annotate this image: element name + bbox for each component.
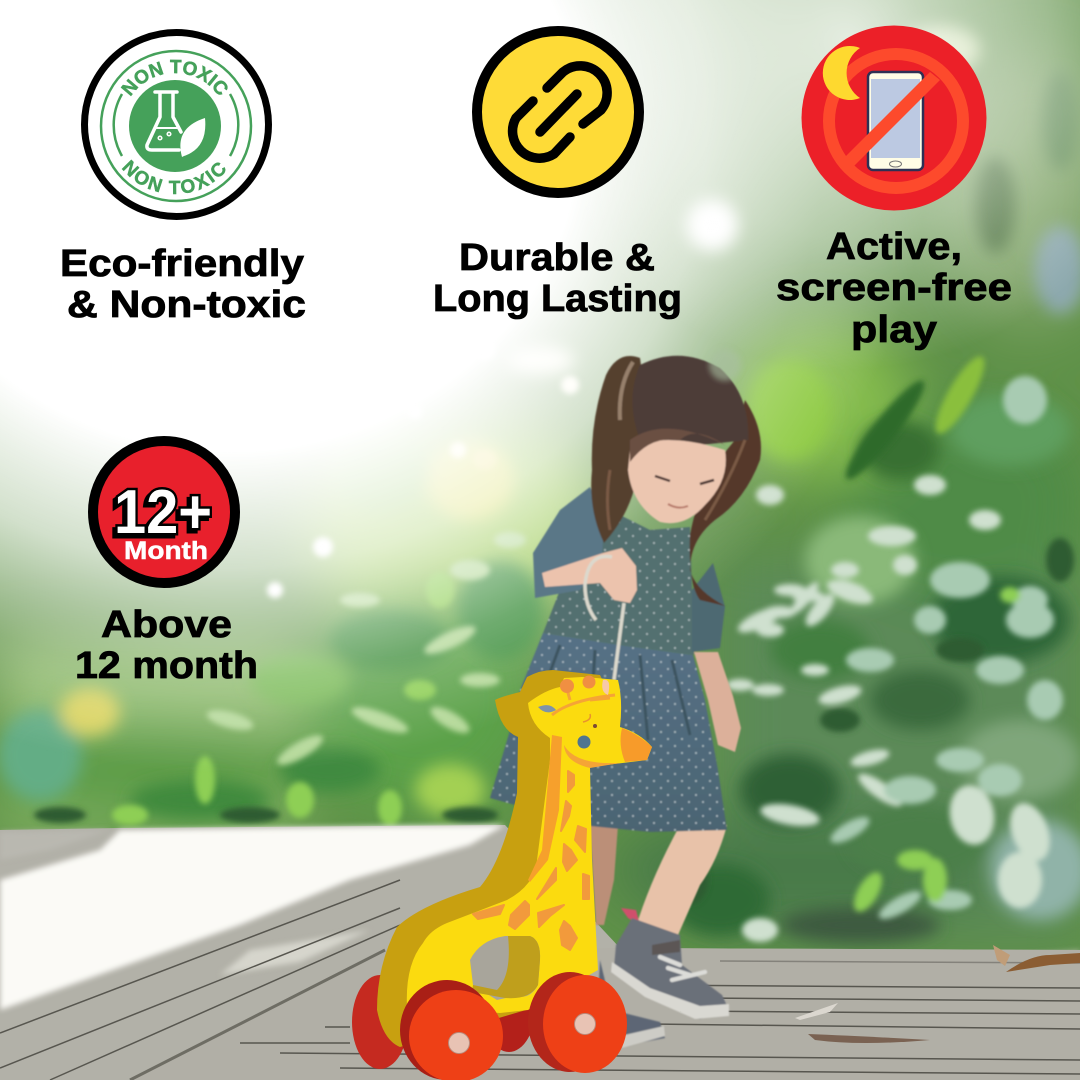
girl: hair and ponytails bbox=[591, 356, 761, 606]
giraffe: side of wooden body bbox=[377, 670, 610, 1047]
girl bbox=[490, 349, 761, 1048]
giraffe: face details bbox=[538, 676, 652, 768]
icon: moon bbox=[823, 46, 860, 100]
giraffe: orange spots bbox=[473, 771, 589, 950]
giraffe: front face of body bbox=[407, 677, 652, 1013]
icon: non toxic badge bbox=[81, 29, 272, 220]
girl: soft leaf over hair bbox=[709, 349, 741, 381]
girl: sleeves bbox=[533, 487, 725, 652]
label: active play: screen-free bbox=[776, 267, 1012, 309]
girl: face bbox=[628, 429, 726, 523]
icon: phone bbox=[868, 72, 923, 170]
label: active play: Active, bbox=[826, 226, 962, 268]
giraffe pull toy bbox=[352, 670, 652, 1080]
icon: non toxic badge: NON TOXIC bbox=[122, 160, 226, 194]
white haze at top right bbox=[0, 0, 1080, 400]
icon: durable chain link bbox=[477, 31, 639, 193]
fallen leaves on deck bbox=[795, 945, 1080, 1043]
giraffe: front wheels bbox=[400, 972, 627, 1080]
icon: no screen bbox=[802, 26, 986, 210]
giraffe: back wheels bbox=[352, 958, 536, 1069]
label: age: 12 month bbox=[75, 645, 258, 687]
label: age: Above bbox=[101, 604, 232, 646]
girl: far shoe bbox=[598, 960, 665, 1048]
icon: flask bbox=[147, 92, 181, 150]
giraffe: wheel hubs bbox=[448, 1014, 596, 1054]
label: durable: Long Lasting bbox=[433, 278, 682, 320]
girl: near shoe bbox=[611, 918, 729, 1019]
girl: arms and hand bbox=[542, 548, 741, 752]
label: eco-friendly: Eco-friendly bbox=[60, 243, 304, 285]
icon: 12+ month badge bbox=[93, 441, 235, 583]
icon: 12+ month badge: 12+ bbox=[114, 478, 212, 547]
icon: leaf bbox=[180, 118, 205, 157]
girl: bodice bbox=[543, 497, 694, 655]
label: active play: play bbox=[851, 309, 937, 351]
giraffe: leg hole bbox=[470, 936, 540, 1000]
icon: 12+ month badge: Month bbox=[124, 537, 208, 565]
giraffe: neck stripe bbox=[528, 735, 562, 882]
label: eco-friendly: & Non-toxic bbox=[67, 284, 306, 326]
wooden deck bbox=[0, 825, 1080, 1080]
girl: legs bbox=[590, 825, 727, 935]
girl: skirt bbox=[490, 633, 727, 832]
icon: non toxic badge: NON TOXIC bbox=[120, 60, 228, 96]
label: durable: Durable & bbox=[459, 237, 655, 279]
